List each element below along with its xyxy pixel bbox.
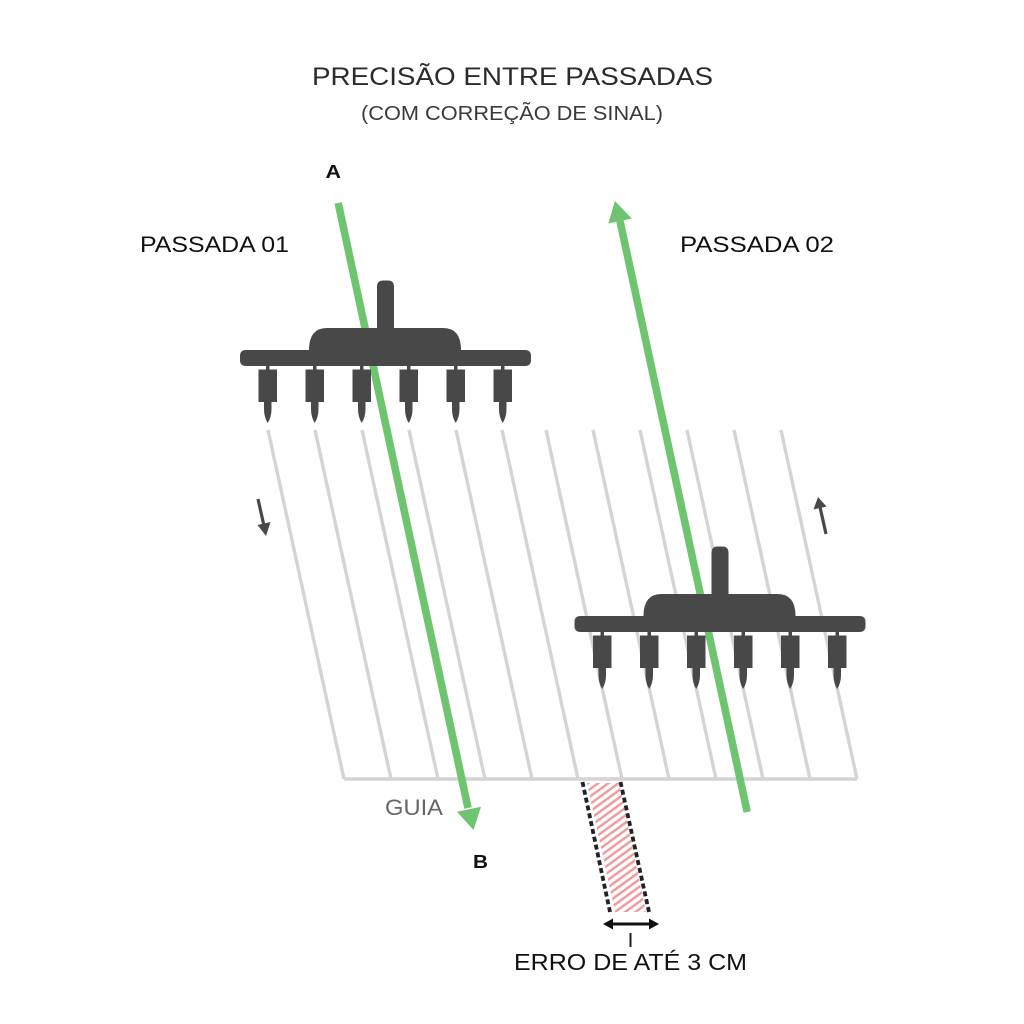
label: passada 02: PASSADA 02	[680, 232, 834, 257]
label: passada 01: PASSADA 01	[140, 232, 289, 257]
error zone: hatched band	[582, 782, 649, 912]
subtitle: (COM CORREÇÃO DE SINAL)	[361, 101, 663, 125]
field grid: passes	[268, 430, 857, 779]
arrow: pass 02 path	[608, 201, 747, 812]
title: PRECISÃO ENTRE PASSADAS	[312, 62, 713, 91]
icon: direction arrow up	[814, 497, 826, 534]
icon: planter passada 01	[240, 280, 531, 423]
label: error value: ERRO DE ATÉ 3 CM	[514, 949, 747, 975]
icon: direction arrow down	[258, 499, 270, 536]
arrow: pass 01 path A to B	[338, 203, 481, 830]
label: point B: B	[473, 852, 488, 872]
label: guia: GUIA	[385, 795, 443, 820]
arrow: error width	[603, 918, 659, 947]
label: point A: A	[326, 162, 341, 182]
icon: planter passada 02	[574, 546, 866, 689]
